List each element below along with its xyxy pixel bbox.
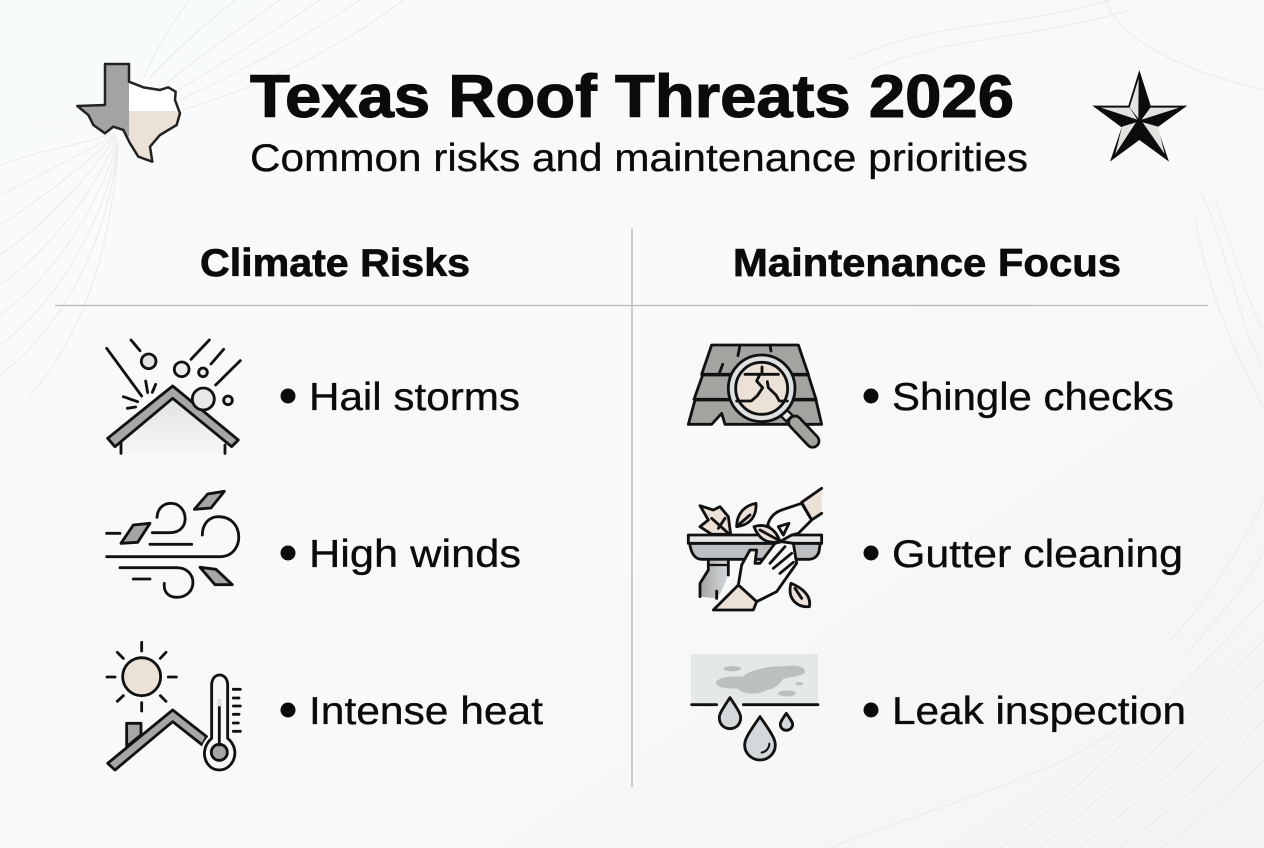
label: shingle checks: Shingle checks (892, 376, 1174, 419)
label: gutter cleaning: Gutter cleaning (892, 533, 1183, 576)
icon: Texas star (1092, 70, 1187, 162)
bullet: intense heat (280, 702, 296, 718)
label: intense heat: Intense heat (309, 690, 543, 733)
label: high winds: High winds (309, 533, 521, 576)
label: leak inspection: Leak inspection (892, 690, 1186, 733)
heading: Maintenance Focus: Maintenance Focus (733, 242, 1121, 285)
icon: high winds (107, 491, 239, 597)
label: hail storms: Hail storms (309, 376, 520, 419)
icon: Texas state map (77, 64, 180, 162)
bullet: high winds (280, 546, 296, 560)
icon: hail on roof (107, 340, 240, 454)
icon: shingle check with magnifier (688, 345, 822, 441)
bullet: leak inspection (864, 702, 878, 718)
icon: heat, sun and thermometer (107, 642, 240, 770)
bullet: hail storms (280, 388, 296, 404)
table dividers (55, 228, 1208, 787)
heading: Climate Risks: Climate Risks (200, 242, 470, 285)
icon: gutter cleaning with hands (688, 488, 822, 610)
bullet: gutter cleaning (864, 546, 878, 560)
panel: maintenance focus list (688, 345, 1186, 760)
title: Texas Roof Threats 2026 (250, 63, 1014, 130)
icon: ceiling leak with drops (691, 654, 818, 760)
panel: climate risks list (107, 340, 543, 770)
bullet: shingle checks (864, 388, 878, 404)
subtitle: Common risks and maintenance priorities (250, 137, 1028, 180)
